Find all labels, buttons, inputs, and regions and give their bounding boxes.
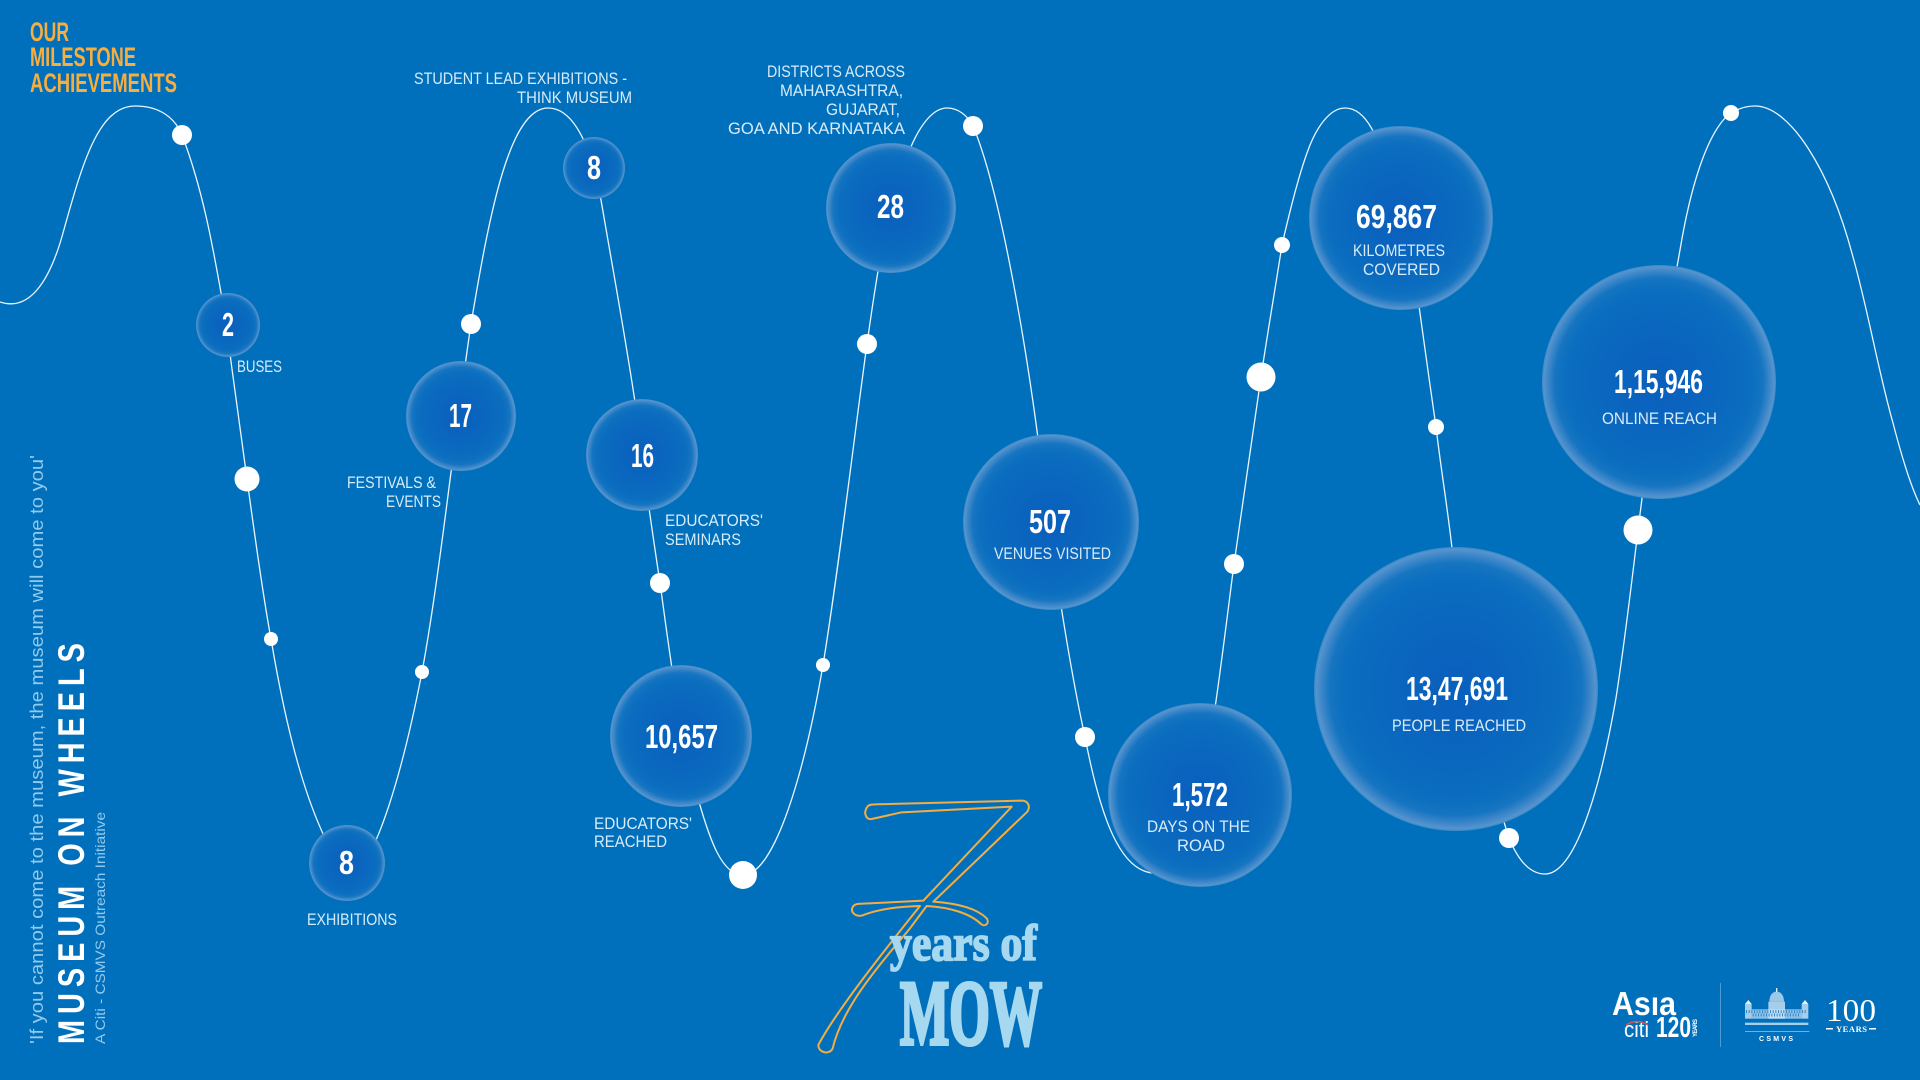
milestone: 17 festivals and events: EVENTS — [386, 493, 441, 511]
logo: csmvs building — [1745, 988, 1809, 1043]
milestone: 16 educators seminars: EDUCATORS' — [665, 512, 763, 530]
milestone: 2 buses: BUSES — [237, 358, 282, 376]
icon: outlined number seven — [818, 801, 1029, 1052]
milestone: 28 districts: GOA AND KARNATAKA — [728, 120, 905, 138]
milestone: 8 exhibitions: 8 — [339, 844, 354, 881]
milestone: 8 student lead exhibitions — [414, 70, 632, 199]
logo: citi asia 120 years: citi — [1624, 1017, 1649, 1042]
milestone: 1,15,946 online reach — [1542, 265, 1776, 499]
heading: our milestone achievements: OUR — [30, 17, 69, 47]
milestone: 69,867 kilometres covered: KILOMETRES — [1353, 242, 1445, 260]
milestone: 13,47,691 people reached: 13,47,691 — [1406, 670, 1508, 707]
milestone: 8 exhibitions: EXHIBITIONS — [307, 911, 397, 929]
milestone: 17 festivals and events: 17 — [449, 397, 472, 434]
heading: our milestone achievements: MILESTONE — [30, 42, 136, 72]
milestone: 1,572 days on the road: 1,572 — [1172, 776, 1228, 813]
logo: 100 years: YEARS — [1836, 1024, 1867, 1034]
milestone: 17 festivals and events: FESTIVALS & — [347, 474, 436, 492]
milestone: 8 student lead exhibitions: THINK MUSEUM — [517, 89, 632, 107]
milestone: 8 student lead exhibitions: 8 — [587, 149, 601, 186]
caption: years of mow — [890, 916, 1042, 1064]
milestone: 1,572 days on the road: ROAD — [1177, 837, 1225, 855]
milestone: 16 educators seminars — [586, 399, 763, 549]
milestone: 507 venues visited — [963, 434, 1139, 610]
milestone: 2 buses: 2 — [222, 306, 234, 343]
milestone: 10,657 educators reached — [594, 665, 752, 851]
milestone: 69,867 kilometres covered: 69,867 — [1356, 198, 1437, 235]
milestone: 28 districts: 28 — [877, 188, 904, 225]
milestone: 1,15,946 online reach: ONLINE REACH — [1602, 410, 1717, 428]
vertical title: museum on wheels: MUSEUM ON WHEELS — [52, 643, 93, 1044]
logo: citi asia 120 years: YEARS — [1693, 1019, 1699, 1037]
milestone: 8 exhibitions — [307, 825, 397, 929]
milestone: 1,15,946 online reach: 1,15,946 — [1614, 363, 1703, 400]
milestone: 10,657 educators reached: EDUCATORS' — [594, 815, 692, 833]
timeline curve — [0, 106, 1920, 875]
logo: citi asia 120 years: 120 — [1656, 1012, 1691, 1044]
milestone: 10,657 educators reached: 10,657 — [645, 718, 718, 755]
milestone: 507 venues visited: 507 — [1029, 503, 1071, 540]
milestone: 10,657 educators reached: REACHED — [594, 833, 667, 851]
milestone: 13,47,691 people reached: PEOPLE REACHED — [1392, 717, 1526, 735]
milestone: 8 student lead exhibitions: STUDENT LEAD EXHIBITIONS - — [414, 70, 627, 88]
logo: csmvs building: CSMVS — [1759, 1036, 1793, 1043]
milestone: 69,867 kilometres covered — [1309, 126, 1493, 310]
milestone: 28 districts — [728, 63, 956, 273]
divider — [1720, 983, 1721, 1047]
milestone: 16 educators seminars: SEMINARS — [665, 531, 741, 549]
vertical subtitle: A Citi - CSMVS Outreach Initiative — [92, 812, 108, 1044]
milestone: 13,47,691 people reached — [1314, 547, 1598, 831]
caption: years of mow: years of — [890, 916, 1038, 972]
milestone: 69,867 kilometres covered: COVERED — [1363, 261, 1440, 279]
heading: our milestone achievements — [30, 17, 177, 98]
milestone: 17 festivals and events — [347, 361, 516, 511]
timeline dots — [172, 105, 1739, 889]
milestone: 28 districts: DISTRICTS ACROSS — [767, 63, 905, 81]
milestone: 28 districts: GUJARAT, — [826, 101, 900, 119]
vertical quote: 'If you cannot come to the museum, the museum will come to you' — [27, 455, 47, 1044]
milestone: 16 educators seminars: 16 — [631, 437, 654, 474]
milestone: 1,572 days on the road: DAYS ON THE — [1147, 818, 1250, 836]
heading: our milestone achievements: ACHIEVEMENTS — [30, 68, 177, 98]
milestone: 507 venues visited: VENUES VISITED — [994, 545, 1111, 563]
milestone: 2 buses — [196, 293, 282, 376]
milestone: 28 districts: MAHARASHTRA, — [780, 82, 903, 100]
milestone: 1,572 days on the road — [1108, 703, 1292, 887]
logo: 100 years: 100 — [1826, 992, 1876, 1028]
caption: years of mow: MOW — [900, 962, 1042, 1064]
logo: citi asia 120 years: Asıa — [1612, 985, 1677, 1022]
logo: citi asia 120 years — [1612, 985, 1699, 1044]
